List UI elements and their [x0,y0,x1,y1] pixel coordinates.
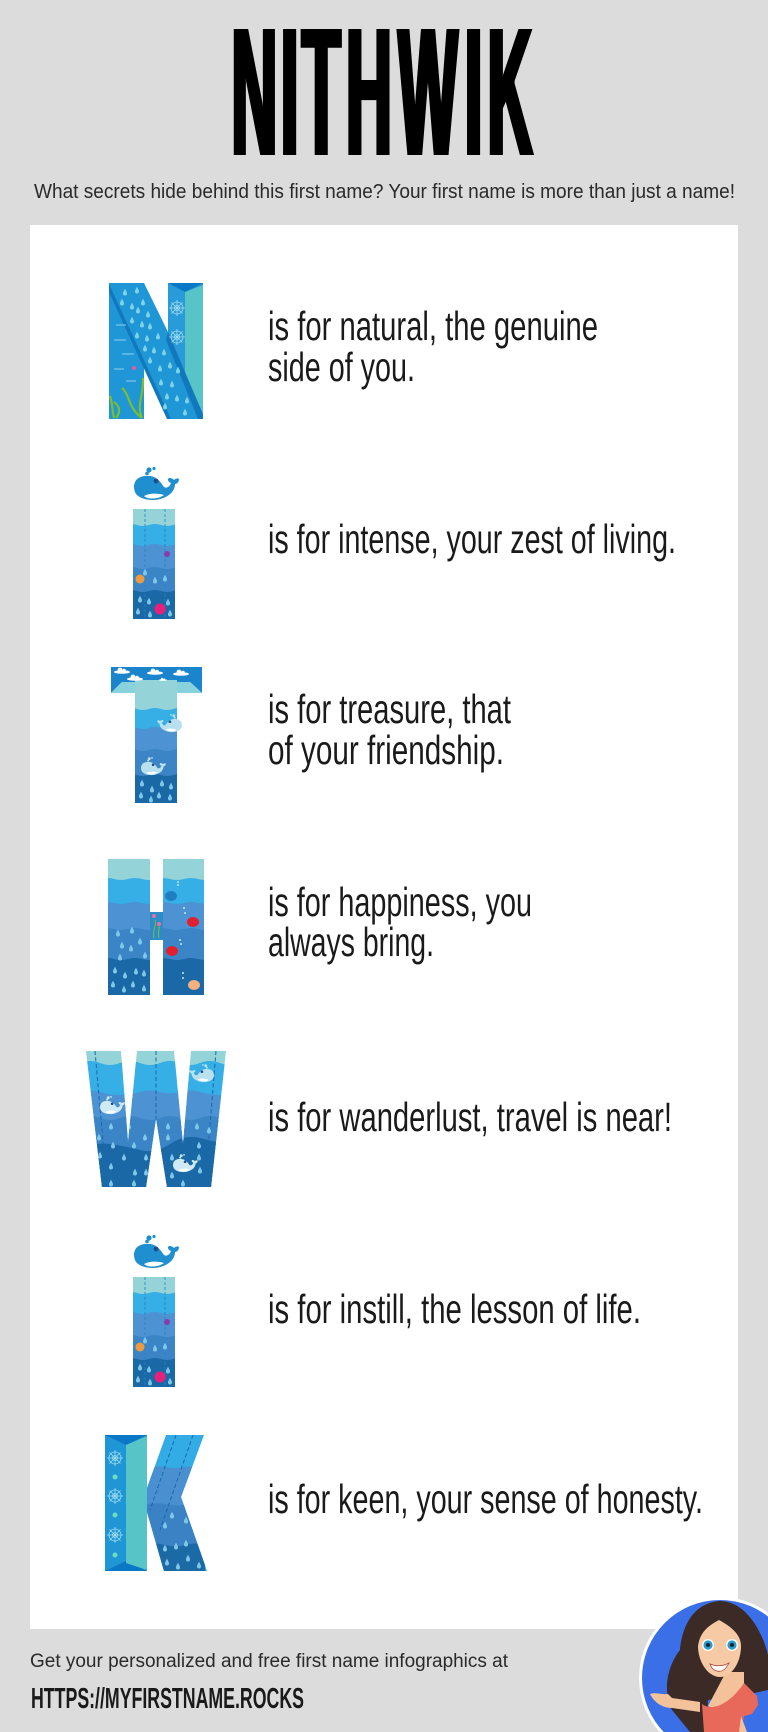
icon: letter I [133,509,175,619]
footer: URL: HTTPS://MYFIRSTNAME.ROCKS [31,1683,304,1715]
icon: letter N [109,283,203,419]
icon: letter T [111,667,202,804]
footer: call to action: Get your personalized and free first name infographics at [30,1651,509,1672]
text: H: always bring. [268,919,434,965]
text: T: of your friendship. [268,727,504,773]
text: T: is for treasure, that [268,686,511,732]
text: T [268,686,511,773]
avatar: woman in circle [639,1597,768,1732]
icon: letter W [86,1051,226,1187]
panel: white content card [30,225,738,1629]
subtitle: What secrets hide behind this first name? Your first name is more than just a name! [34,181,735,203]
text: H: is for happiness, you [268,879,532,925]
text: N: side of you. [268,344,415,390]
text: N [268,303,598,390]
icon: whale over letter I [134,467,179,500]
text: H [268,879,532,965]
icon: letter K [105,1435,207,1572]
icon: second letter I [133,1277,175,1387]
icon: letter H [108,859,204,995]
icon: whale over second letter I [134,1235,179,1268]
text: N: is for natural, the genuine [268,303,598,349]
